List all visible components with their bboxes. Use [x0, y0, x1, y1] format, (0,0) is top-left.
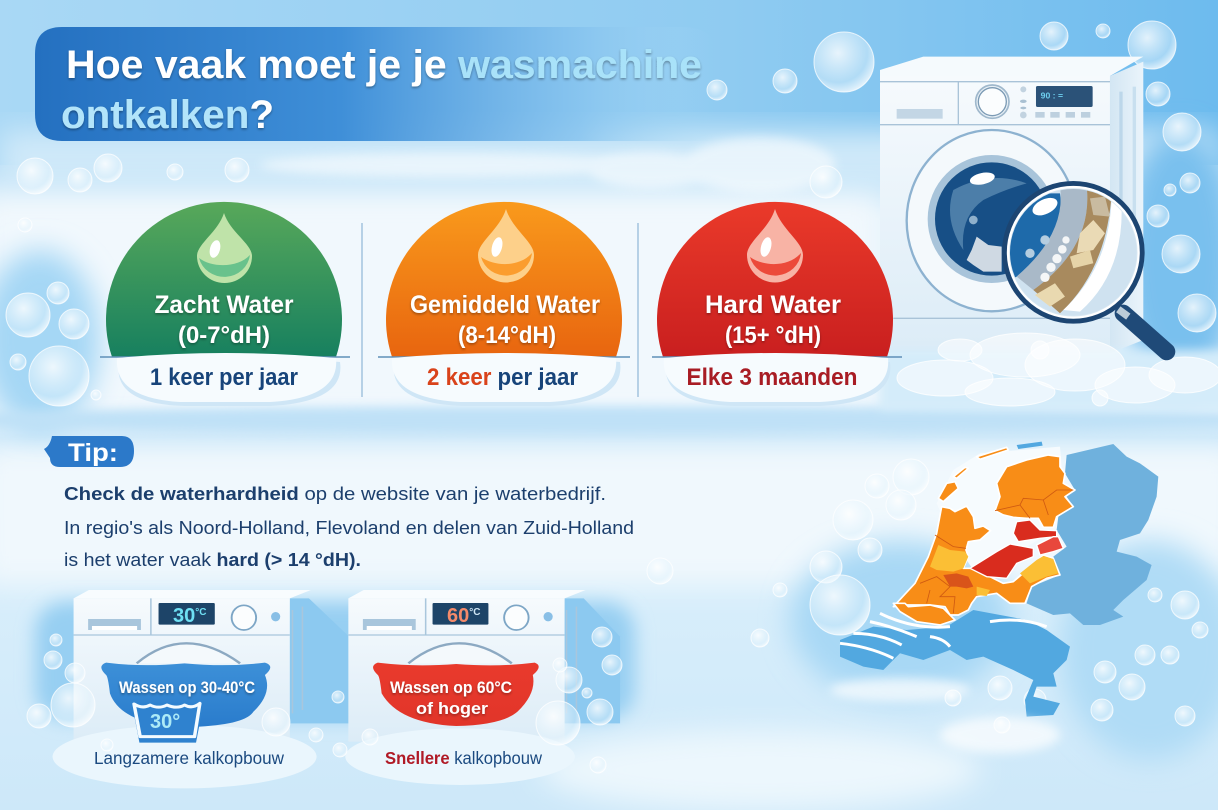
- circle: [657, 202, 893, 357]
- white coast lines: [840, 613, 1047, 658]
- yellow regions: [930, 545, 1058, 596]
- frequency: 1 keer per jaar: [150, 364, 298, 391]
- dividers: [362, 223, 638, 397]
- frequency: Elke 3 maanden: [686, 364, 858, 391]
- machine body: [53, 590, 349, 788]
- machine body: [345, 590, 620, 785]
- heading: [410, 291, 600, 349]
- heading: Hard Water: [705, 291, 841, 319]
- magnifying glass: [1003, 184, 1167, 352]
- label: of hoger: [416, 699, 488, 718]
- label: [390, 678, 512, 718]
- heading: [154, 291, 294, 349]
- base line: [100, 356, 350, 358]
- title text: ontkalken?: [61, 93, 274, 137]
- display value: °C: [469, 607, 480, 618]
- tip text: In regio's als Noord-Holland, Flevoland en delen van Zuid-Holland: [64, 517, 634, 538]
- large washing machine: [880, 57, 1143, 353]
- bubbles around small machines: [27, 627, 622, 773]
- display value: 30: [173, 605, 195, 627]
- heading: Zacht Water: [154, 291, 294, 319]
- heading: Gemiddeld Water: [410, 291, 600, 319]
- small machine: 30 degrees: [53, 590, 349, 788]
- display: [1035, 86, 1093, 118]
- blue regions: [840, 442, 1158, 717]
- display: 90 : =: [1041, 90, 1063, 100]
- icon: water drop: [478, 209, 534, 282]
- machine body: [880, 57, 1143, 353]
- tip text: is het water vaak hard (> 14 °dH).: [64, 549, 361, 570]
- foam: upper waves: [260, 137, 835, 193]
- circle: [106, 202, 342, 357]
- label: Wassen op 30-40°C: [119, 678, 255, 697]
- panel: medium water: [378, 202, 630, 406]
- caption: Langzamere kalkopbouw: [94, 748, 284, 768]
- tip badge: [44, 436, 134, 467]
- frequency: [117, 353, 340, 406]
- province borders: [920, 490, 1073, 613]
- base line: [652, 356, 902, 358]
- title banner: [35, 27, 715, 141]
- title text: [61, 43, 702, 137]
- heading: (0-7°dH): [178, 322, 270, 349]
- tip text: Check de waterhardheid op de website van je waterbedrijf.: [64, 483, 606, 504]
- display value: °C: [195, 607, 206, 618]
- foam below map: [830, 678, 1060, 753]
- circle: [386, 202, 622, 357]
- panel: soft water: [100, 202, 350, 406]
- panel: hard water: [652, 202, 902, 406]
- door: [907, 130, 1077, 311]
- icon: water drop: [747, 209, 803, 282]
- icon text: 30 degrees: 30°: [150, 711, 180, 733]
- heading: (15+ °dH): [725, 322, 821, 349]
- tip badge: Tip:: [68, 439, 118, 467]
- red regions: [970, 520, 1063, 578]
- frequency: [664, 353, 890, 406]
- display value: 60: [447, 605, 469, 627]
- label: Wassen op 60°C: [390, 678, 512, 697]
- base line: [378, 356, 630, 358]
- frequency: [392, 353, 620, 406]
- map of the Netherlands: [840, 442, 1158, 717]
- control dial: [976, 85, 1027, 118]
- tip text: [64, 483, 634, 570]
- foam: bottom of large machine: [880, 333, 1218, 410]
- title text: Hoe vaak moet je je wasmachine: [66, 43, 702, 87]
- heading: (8-14°dH): [458, 322, 556, 349]
- dark orange patch: [943, 573, 973, 588]
- frequency: 2 keer per jaar: [427, 364, 578, 391]
- small machine: 60 degrees: [345, 590, 620, 785]
- icon: water drop: [197, 213, 252, 283]
- caption: Snellere kalkopbouw: [385, 748, 542, 768]
- heading: [705, 291, 841, 349]
- lake area: [937, 447, 1067, 570]
- orange regions: [893, 447, 1075, 625]
